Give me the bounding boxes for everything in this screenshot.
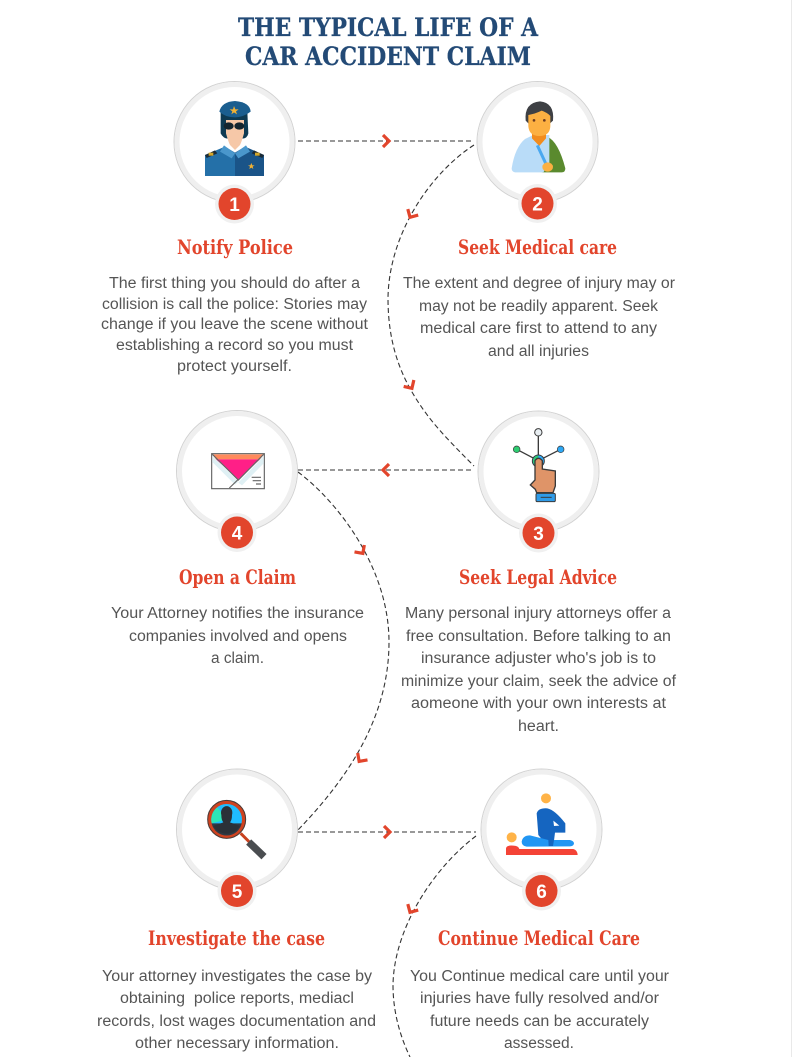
title: CAR ACCIDENT CLAIM [245,42,531,72]
number badge 1 [215,184,254,224]
title [238,13,539,72]
text block: seek legal advice [401,605,677,735]
icon: police officer [174,82,295,202]
panel: step 5 investigate the case [97,769,376,1052]
text block: notify police: The first thing you should do after a [109,275,360,292]
text block: investigate the case: obtaining police reports, mediacl [120,990,354,1007]
arrow: step 1 to step 2 [298,135,474,147]
text block: seek medical care: medical care first to attend to any [420,320,657,337]
text block: open a claim: companies involved and opens [129,628,347,645]
text block: open a claim: Your Attorney notifies the insurance [111,605,364,622]
heading: continue medical care: Continue Medical Care [438,927,640,950]
text block: continue medical care [410,968,669,1052]
number badge 6 [522,872,561,910]
icon: magnifying glass over person [176,769,298,890]
panel: step 1 notify police [101,82,369,375]
number badge 1: 1 [229,195,240,216]
panel: step 2 seek medical care [403,82,675,360]
arrow: step 6 onward [393,836,476,1057]
text block: notify police: protect yourself. [177,358,292,375]
number badge 3: 3 [533,524,544,545]
number badge 3 [519,514,558,552]
text block: notify police: collision is call the police: Stories may [102,296,367,313]
text block: continue medical care: You Continue medical care until your [410,968,669,985]
text block: seek legal advice: heart. [518,718,559,735]
number badge 5 [218,872,256,910]
text block: seek medical care: may not be readily apparent. Seek [419,298,658,315]
text block: continue medical care: future needs can be accurately [430,1013,649,1030]
icon: hand touching network nodes [478,411,599,532]
number badge 5: 5 [232,882,243,903]
text block: open a claim: a claim. [211,650,264,667]
text block: seek medical care: and all injuries [488,343,589,360]
text block: continue medical care: injuries have fully resolved and/or [420,990,659,1007]
heading: investigate the case: Investigate the case [148,927,325,950]
text block: notify police: change if you leave the scene without [101,316,369,333]
panel: step 3 seek legal advice [401,411,677,735]
text block: seek medical care: The extent and degree of injury may or [403,275,675,292]
number badge 6: 6 [536,882,547,903]
heading: seek medical care: Seek Medical care [458,236,617,259]
arrow: step 3 to step 4 [298,464,474,476]
text block: notify police [101,275,369,375]
text block: seek legal advice: insurance adjuster who's job is to [421,650,656,667]
text block: continue medical care: assessed. [504,1035,574,1052]
number badge 2 [518,184,557,223]
arrow: step 2 to step 3 [388,145,474,466]
number badge 2: 2 [532,194,543,216]
text block: seek medical care [403,275,675,360]
heading: seek legal advice: Seek Legal Advice [459,566,617,589]
text block: investigate the case: other necessary information. [135,1035,339,1052]
panel: step 6 continue medical care [410,769,669,1052]
text block: open a claim [111,605,364,667]
arrow: step 5 to step 6 [298,826,476,838]
title: THE TYPICAL LIFE OF A [238,13,539,43]
icon: injured person with arm sling [477,82,598,202]
icon: envelope [176,410,298,532]
text block: investigate the case: Your attorney investigates the case by [102,968,372,985]
text block: seek legal advice: free consultation. Before talking to an [406,628,671,645]
text block: investigate the case: records, lost wages documentation and [97,1013,376,1030]
number badge 4: 4 [232,524,243,544]
icon: physical therapy [481,769,602,890]
text block: seek legal advice: minimize your claim, seek the advice of [401,673,677,690]
number badge 4 [218,513,256,552]
text block: notify police: establishing a record so you must [116,337,354,354]
text block: seek legal advice: aomeone with your own interests at [411,695,667,712]
heading: open a claim: Open a Claim [179,566,296,589]
heading: notify police: Notify Police [177,236,293,259]
text block: investigate the case [97,968,376,1052]
panel: step 4 open a claim [111,410,364,667]
text block: seek legal advice: Many personal injury attorneys offer a [405,605,671,622]
arrow: step 4 to step 5 [298,472,389,830]
